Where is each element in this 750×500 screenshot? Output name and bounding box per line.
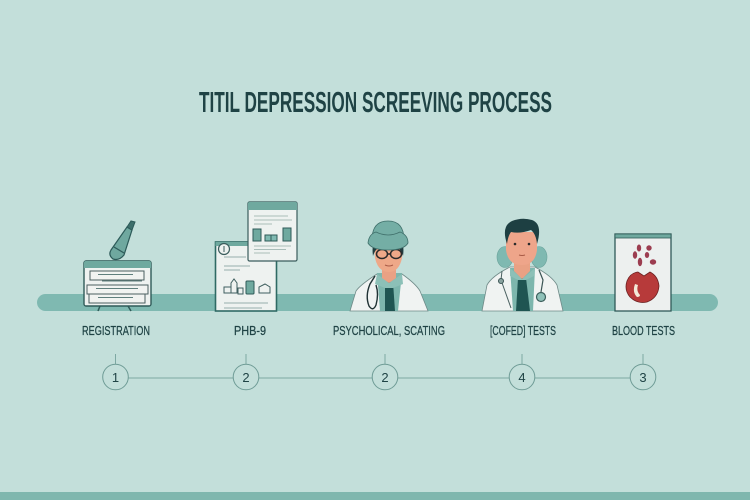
timeline bar [37,294,718,311]
step number 2 (second) [372,364,398,390]
step labels [82,323,675,338]
icon: registration desk [84,221,151,311]
icon: PHQ tablet [216,242,276,311]
step number 2 [233,364,259,390]
step number 4 [509,364,535,390]
label: psychological scating: PSYCHOLICAL, SCATING [333,323,445,338]
icon: telescope pen [110,221,135,260]
icon: chart document [248,202,297,261]
label: PHB-9: PHB-9 [234,323,266,338]
icon: doctor with stethoscope [482,219,563,311]
label: tests: [COFED] TESTS [490,323,556,338]
label: blood tests: BLOOD TESTS [612,323,675,338]
step number 1 [103,364,128,390]
step number 3: 3 [639,370,647,385]
label: registration: REGISTRATION [82,323,150,338]
icon: doctor with hat [350,221,428,311]
step number 2: 2 [242,370,250,385]
step number 2 (second): 2 [381,370,389,385]
icon: blood test card [615,234,671,311]
step number 3 [630,364,656,390]
step number 1: 1 [112,370,119,385]
glasses [376,250,402,258]
footer band [0,492,750,500]
step number 4: 4 [518,370,526,385]
step connector line [128,377,630,379]
